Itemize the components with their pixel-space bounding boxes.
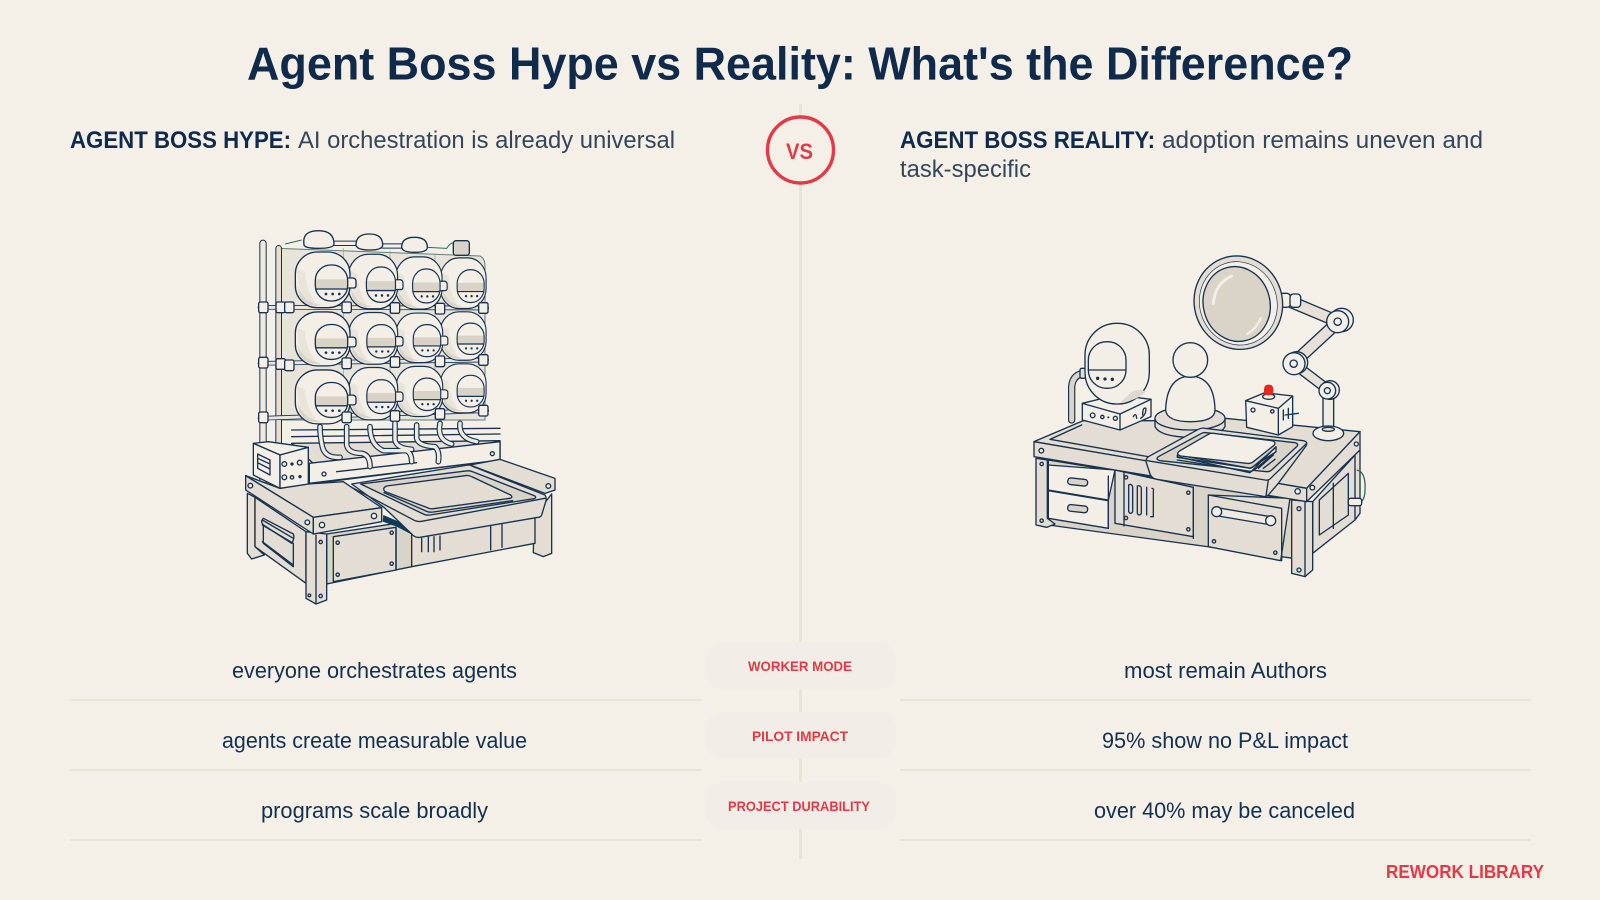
front leg [1292,500,1313,577]
side panel [255,497,306,583]
mirror arm [1277,293,1353,441]
label pill: pilot impact: PILOT IMPACT [752,728,848,744]
side panel [1313,455,1355,553]
illustration: reality workbench with one bot [1034,244,1365,577]
bot row 1 [295,252,486,309]
back right leg [1346,450,1360,520]
heading: reality [900,127,1483,183]
bench top [1034,418,1360,488]
rails are drawn beneath the bots [260,307,487,418]
control box [253,442,308,455]
source credit: REWORK LIBRARY [1386,862,1544,882]
row divider: left [70,699,701,841]
heading: hype: AGENT BOSS HYPE: [70,127,291,154]
heading: hype: AI orchestration is already universal [298,127,675,154]
person on pedestal [1155,343,1225,437]
title: Agent Boss Hype vs Reality: What's the Difference? [247,38,1353,90]
label pill: project durability [705,782,896,829]
left table top [246,476,382,517]
tray with paper stack [1146,428,1307,496]
door with handle [1208,495,1290,561]
bench skirt [1048,460,1293,558]
left leg [1036,458,1055,527]
heading: reality: AGENT BOSS REALITY: [900,127,1155,154]
box with red button [1246,385,1298,435]
legs [533,494,552,557]
heading: reality: adoption remains uneven and [1162,127,1483,154]
hype row: worker mode: everyone orchestrates agents [232,658,517,683]
row divider: right [900,699,1531,841]
tray [352,465,546,537]
center divider [799,104,802,859]
vs badge [768,117,834,183]
right table top [470,459,555,493]
mirror [1182,244,1295,361]
dark wedge [383,515,411,534]
drawers [1048,465,1115,500]
bot row 3 [295,364,486,424]
reality row: pilot impact: 95% show no P&L impact [1102,728,1348,753]
bot row 2 [295,312,486,366]
hype row: pilot impact: agents create measurable value [222,728,527,753]
reality row: worker mode: most remain Authors [1124,658,1327,683]
reality row: project durability: over 40% may be canceled [1094,798,1355,823]
label pill: project durability: PROJECT DURABILITY [728,798,871,814]
label pill: worker mode [705,642,896,689]
illustration: hype machine with many bots [246,231,555,604]
front panels [327,523,412,584]
small bot on base [1080,323,1151,430]
label pill: pilot impact [705,712,896,759]
vs badge: VS [786,139,813,164]
label pill: worker mode: WORKER MODE [748,658,852,674]
hose [1072,373,1083,420]
front leg [306,532,327,604]
heading: reality: task-specific [900,156,1031,183]
heading: hype [70,127,675,154]
hype row: project durability: programs scale broadly [261,798,488,823]
